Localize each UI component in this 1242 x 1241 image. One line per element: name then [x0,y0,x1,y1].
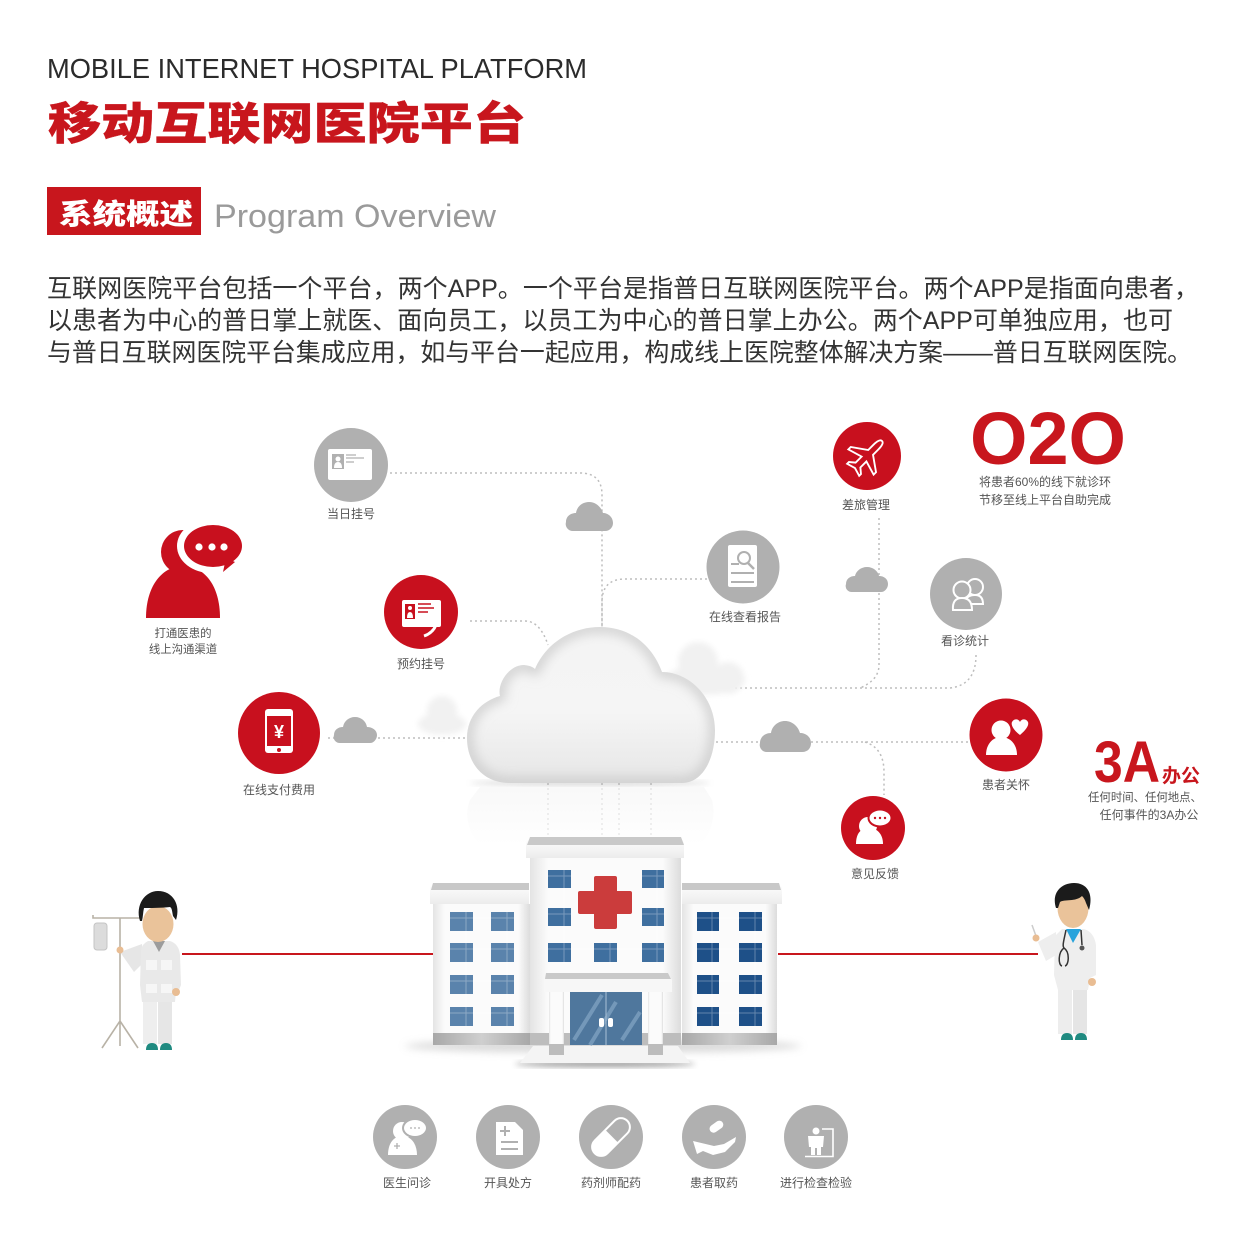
step: 医生问诊: 医生问诊 [383,1176,431,1190]
step: 药剂师配药 [579,1105,643,1190]
icon: plane [841,428,895,482]
center block [526,837,684,1045]
node: 打通医患渠道 [146,519,245,656]
step: 医生问诊 [373,1105,437,1190]
callout: O2O: O2O [970,397,1126,480]
node: 在线支付费用: 在线支付费用 [243,783,315,797]
callout: 3A office [1088,730,1202,822]
dotted connectors [328,473,976,838]
hospital building [405,837,801,1067]
icon: door and person [805,1128,833,1156]
chinese title: 移动互联网医院平台 [48,99,526,149]
node: 在线查看报告 [706,530,781,624]
icon: id card [328,449,372,480]
node: 看诊统计: 看诊统计 [941,634,989,648]
english title: MOBILE INTERNET HOSPITAL PLATFORM [47,53,587,84]
callout: O2O: 将患者60%的线下就诊环 [979,474,1111,489]
small gray clouds [334,502,888,752]
entrance [520,973,690,1063]
node: 在线支付费用 [238,692,320,797]
patient figure with IV stand [93,891,181,1050]
step: 药剂师配药: 药剂师配药 [581,1175,641,1190]
step: 开具处方: 开具处方 [484,1175,532,1190]
icon: person heart [986,719,1028,755]
doctor figure [1032,883,1096,1040]
icon: doctor bubble [388,1118,428,1155]
section badge [47,187,201,235]
node: 差旅管理: 差旅管理 [842,497,890,512]
intro paragraph [47,275,1199,367]
intro paragraph: 以患者为中心的普日掌上就医、面向员工，以员工为中心的普日掌上办公。两个APP可单独应用，也可 [47,307,1173,335]
node: 当日挂号: 当日挂号 [327,507,375,521]
callout: 3A office: 任何时间、任何地点、 [1088,791,1202,804]
step: 患者取药 [682,1105,746,1190]
section english heading: Program Overview [214,198,497,234]
node: 在线查看报告: 在线查看报告 [709,609,781,624]
node: 看诊统计 [930,558,1002,648]
step: 患者取药: 患者取药 [690,1176,738,1190]
node: 差旅管理 [833,422,901,512]
intro paragraph: 与普日互联网医院平台集成应用，如与平台一起应用，构成线上医院整体解决方案——普日互联网医院。 [47,339,1192,367]
intro paragraph: 互联网医院平台包括一个平台，两个APP。一个平台是指普日互联网医院平台。两个APP是指面向患者， [47,275,1199,303]
callout: 3A office: 办公 [1162,765,1200,787]
icon: person bubble [856,808,892,844]
icon: report magnifier [728,545,757,587]
step: 进行检查检验 [780,1105,852,1190]
node: 患者关怀 [970,698,1042,792]
left wing [430,883,530,1045]
callout: 3A office: 3A [1094,730,1160,795]
icon: hand and pill [693,1119,736,1155]
step: 开具处方 [476,1105,540,1190]
callout: 3A office: 任何事件的3A办公 [1100,807,1198,822]
node: 打通医患渠道: 线上沟通渠道 [149,642,217,656]
step: 进行检查检验: 进行检查检验 [780,1175,852,1190]
callout: O2O: 节移至线上平台自助完成 [979,492,1111,507]
right wing [682,883,782,1045]
red connection lines [182,953,1038,955]
icon: pill [588,1114,634,1160]
node: 打通医患渠道: 打通医患的 [155,626,211,640]
section badge: 系统概述 [59,198,193,230]
icon: card and phone [402,600,441,636]
central cloud [418,627,745,845]
icon: person speech [146,519,245,618]
icon: phone yuan: ¥ [274,722,284,742]
node: 患者关怀: 患者关怀 [982,778,1030,792]
icon: two persons [953,579,983,610]
icon: prescription [496,1122,523,1155]
node: 预约挂号: 预约挂号 [397,656,445,671]
node: 意见反馈 [841,796,905,881]
node: 预约挂号 [384,575,458,671]
node: 意见反馈: 意见反馈 [851,866,899,881]
node: 当日挂号 [314,428,388,521]
